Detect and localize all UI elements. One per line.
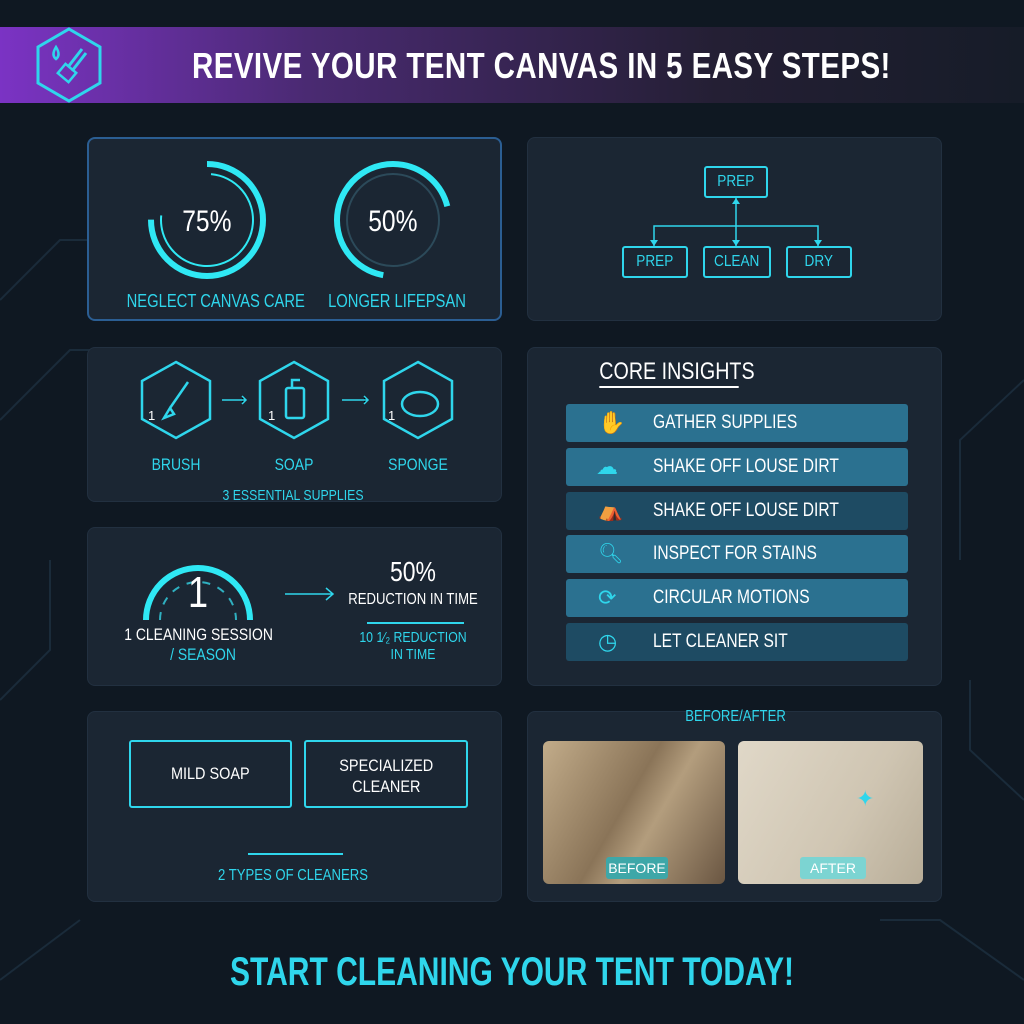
panel: cleaners: SPECIALIZED <box>339 756 433 775</box>
title: REVIVE YOUR TENT CANVAS IN 5 EASY STEPS! <box>192 45 891 86</box>
image after: ✦ <box>856 786 874 811</box>
panel: supplies: 1 <box>388 408 395 423</box>
panel: before/after <box>527 711 942 902</box>
image before <box>543 741 725 884</box>
panel: cleaners: CLEANER <box>352 777 420 796</box>
label neglect: NEGLECT CANVAS CARE <box>127 291 305 311</box>
image after: AFTER <box>810 860 856 876</box>
arrow <box>285 588 334 600</box>
insight rows: CIRCULAR MOTIONS <box>653 587 810 608</box>
insight rows: ◷ <box>598 629 617 654</box>
icon: hexagon brush <box>36 27 102 103</box>
panel: cleaning session <box>87 527 502 686</box>
heading core insights: CORE INSIGHTS <box>599 358 755 385</box>
panel: cleaners <box>87 711 502 902</box>
panel: supplies: SPONGE <box>388 455 448 474</box>
panel: supplies: 1 <box>268 408 275 423</box>
ring 50% <box>334 161 450 278</box>
panel: cleaning session: 10 1⁄₂ REDUCTION <box>359 629 467 646</box>
insight rows: ✋ <box>598 410 625 435</box>
panel: cleaning session: REDUCTION IN TIME <box>348 591 478 608</box>
box CLEAN: CLEAN <box>714 253 760 270</box>
ring 75%: 75% <box>182 204 231 238</box>
panel: stats rings <box>87 137 502 321</box>
panel: cleaning session: IN TIME <box>391 646 435 663</box>
insight rows: LET CLEANER SIT <box>653 631 788 652</box>
box PREP <box>622 246 688 278</box>
panel: supplies <box>87 347 502 502</box>
insight rows: ⟳ <box>598 585 616 610</box>
panel: cleaning session: 1 CLEANING SESSION <box>124 625 273 644</box>
panel: supplies: 1 <box>148 408 155 423</box>
panel: supplies: SOAP <box>275 455 313 474</box>
insight rows: ⛺ <box>598 500 623 522</box>
panel: cleaning session: / SEASON <box>170 645 236 664</box>
panel: core insights <box>527 347 942 686</box>
panel: cleaning session: 1 <box>188 568 208 617</box>
insight rows: ☁ <box>596 454 618 479</box>
insight rows: GATHER SUPPLIES <box>653 412 797 433</box>
labels: BRUSH <box>152 455 200 474</box>
ring 50%: 50% <box>368 204 417 238</box>
image before: BEFORE <box>608 860 666 876</box>
panel: flowchart <box>527 137 942 321</box>
insight rows: 🔍︎ <box>598 543 623 565</box>
insight rows: SHAKE OFF LOUSE DIRT <box>653 500 839 521</box>
insight rows <box>566 404 908 661</box>
panel: cleaners: 2 TYPES OF CLEANERS <box>218 867 368 884</box>
ring 75% <box>148 161 266 279</box>
label lifespan: LONGER LIFEPSAN <box>328 291 466 311</box>
box CLEAN <box>703 246 771 278</box>
box PREP: PREP <box>636 253 674 270</box>
box DRY <box>786 246 852 278</box>
box DRY: DRY <box>805 253 833 270</box>
panel: cleaning session: 50% <box>390 556 436 587</box>
insight rows: INSPECT FOR STAINS <box>653 543 817 564</box>
footer call to action: START CLEANING YOUR TENT TODAY! <box>230 950 794 994</box>
image after <box>738 741 923 884</box>
header bar <box>0 27 1024 103</box>
panel: supplies: 3 ESSENTIAL SUPPLIES <box>222 487 364 504</box>
panel: cleaners: MILD SOAP <box>171 764 250 783</box>
box PREP top <box>704 166 768 198</box>
panel: before/after: BEFORE/AFTER <box>685 708 786 725</box>
insight rows: SHAKE OFF LOUSE DIRT <box>653 456 839 477</box>
box PREP top: PREP <box>717 173 755 190</box>
